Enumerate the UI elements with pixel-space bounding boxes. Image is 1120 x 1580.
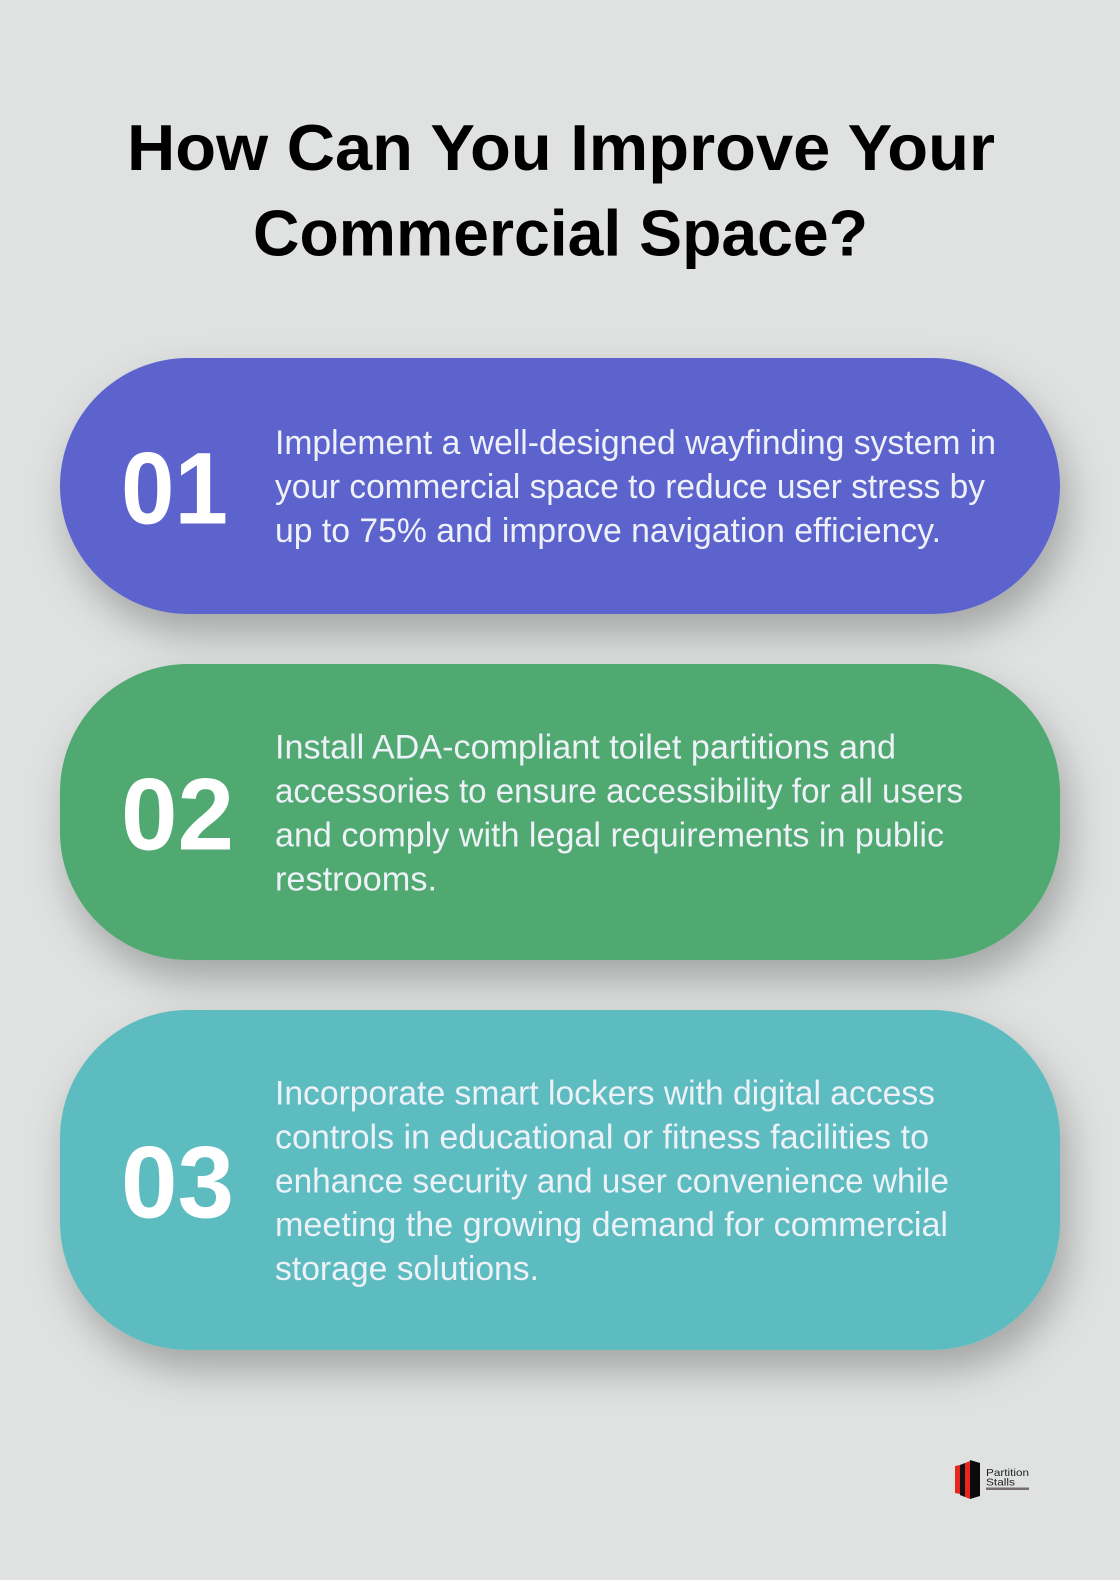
text: step 03: storage solutions. xyxy=(275,1250,539,1288)
number 02: 02 xyxy=(121,758,234,872)
text: step 03: meeting the growing demand for commercial xyxy=(275,1206,948,1244)
text: step 01: Implement a well-designed wayfinding system in xyxy=(275,424,996,462)
text: step 01 xyxy=(275,424,996,550)
logo: Partition Stalls xyxy=(955,1460,1029,1499)
logo wordmark xyxy=(986,1467,1029,1490)
number 01: 01 xyxy=(121,432,228,546)
text: step 02: Install ADA-compliant toilet partitions and xyxy=(275,728,896,766)
logo wordmark: Stalls xyxy=(986,1476,1015,1488)
number 03: 03 xyxy=(121,1126,234,1240)
panel: step 01 xyxy=(60,358,1060,614)
text: step 03: enhance security and user convenience while xyxy=(275,1162,949,1200)
title xyxy=(127,111,995,270)
text: step 03 xyxy=(275,1074,949,1288)
text: step 02: accessories to ensure accessibility for all users xyxy=(275,772,963,810)
text: step 01: up to 75% and improve navigation efficiency. xyxy=(275,512,941,550)
pill background: step 02 xyxy=(60,664,1060,960)
text: step 01: your commercial space to reduce user stress by xyxy=(275,468,985,506)
logo wordmark: Partition xyxy=(986,1467,1029,1479)
pill background: step 03 xyxy=(60,1010,1060,1350)
title: How Can You Improve Your xyxy=(127,111,995,184)
pill background: step 01 xyxy=(60,358,1060,614)
text: step 03: controls in educational or fitness facilities to xyxy=(275,1118,929,1156)
title: Commercial Space? xyxy=(253,196,868,270)
text: step 02: restrooms. xyxy=(275,860,437,898)
panel: step 02 xyxy=(60,664,1060,960)
text: step 03: Incorporate smart lockers with digital access xyxy=(275,1074,935,1112)
text: step 02 xyxy=(275,728,963,898)
icon: partition bars xyxy=(955,1460,980,1499)
panel: step 03 xyxy=(60,1010,1060,1350)
text: step 02: and comply with legal requirements in public xyxy=(275,816,944,854)
